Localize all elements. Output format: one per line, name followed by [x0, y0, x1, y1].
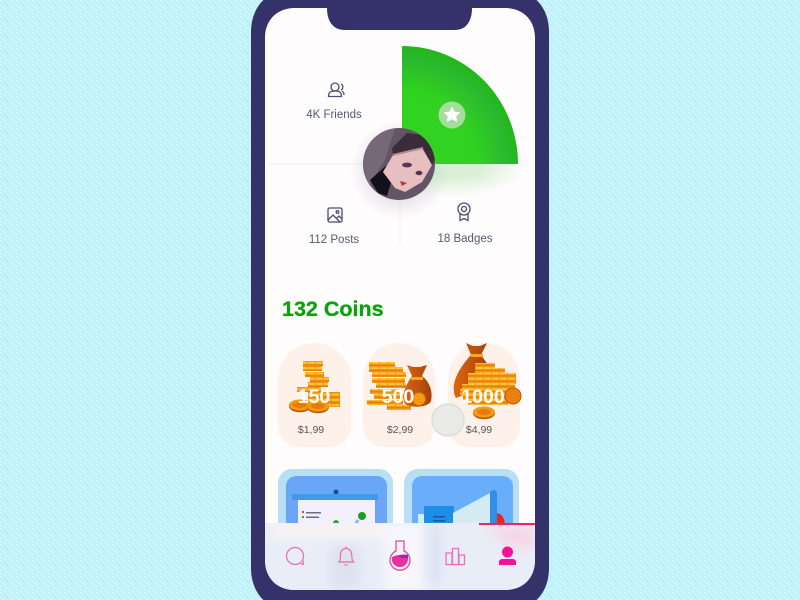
phone screen	[265, 0, 535, 600]
label: 112 Posts: 112 Posts	[309, 234, 359, 246]
coin card 150	[278, 343, 351, 447]
icon: flask	[390, 541, 410, 570]
coin card 150: $1,99	[298, 424, 324, 436]
coin card 500	[363, 343, 435, 447]
coin card 1000: $4,99	[466, 424, 492, 436]
icon: badge	[458, 203, 470, 220]
label: 18 Badges: 18 Badges	[438, 233, 493, 245]
quadrant divider lines	[268, 164, 400, 245]
icon: posts	[328, 208, 342, 222]
green quadrant sector	[402, 46, 518, 164]
icon: bell	[338, 546, 354, 565]
coin card 500: $2,99	[387, 424, 413, 436]
heading: coins: 132 Coins	[282, 297, 384, 321]
coin card 1000	[448, 343, 521, 447]
touch indicator	[432, 404, 464, 436]
bottom navigation bar	[265, 520, 535, 593]
icon: star badge	[438, 102, 466, 128]
icon: friends	[328, 83, 344, 96]
avatar shadow	[358, 131, 438, 212]
coin card 1000: 1000	[461, 386, 505, 408]
promo card: browser	[278, 469, 393, 523]
avatar portrait	[363, 128, 436, 200]
coin card 150: 150	[298, 386, 330, 408]
green glow	[426, 164, 516, 193]
promo card: megaphone	[404, 469, 519, 523]
icon: chat	[286, 548, 304, 564]
phone frame	[251, 0, 549, 600]
icon: profile	[499, 546, 516, 565]
label: 4K Friends: 4K Friends	[306, 109, 362, 121]
icon: bar chart	[446, 548, 464, 564]
coin card 500: 500	[382, 386, 414, 408]
